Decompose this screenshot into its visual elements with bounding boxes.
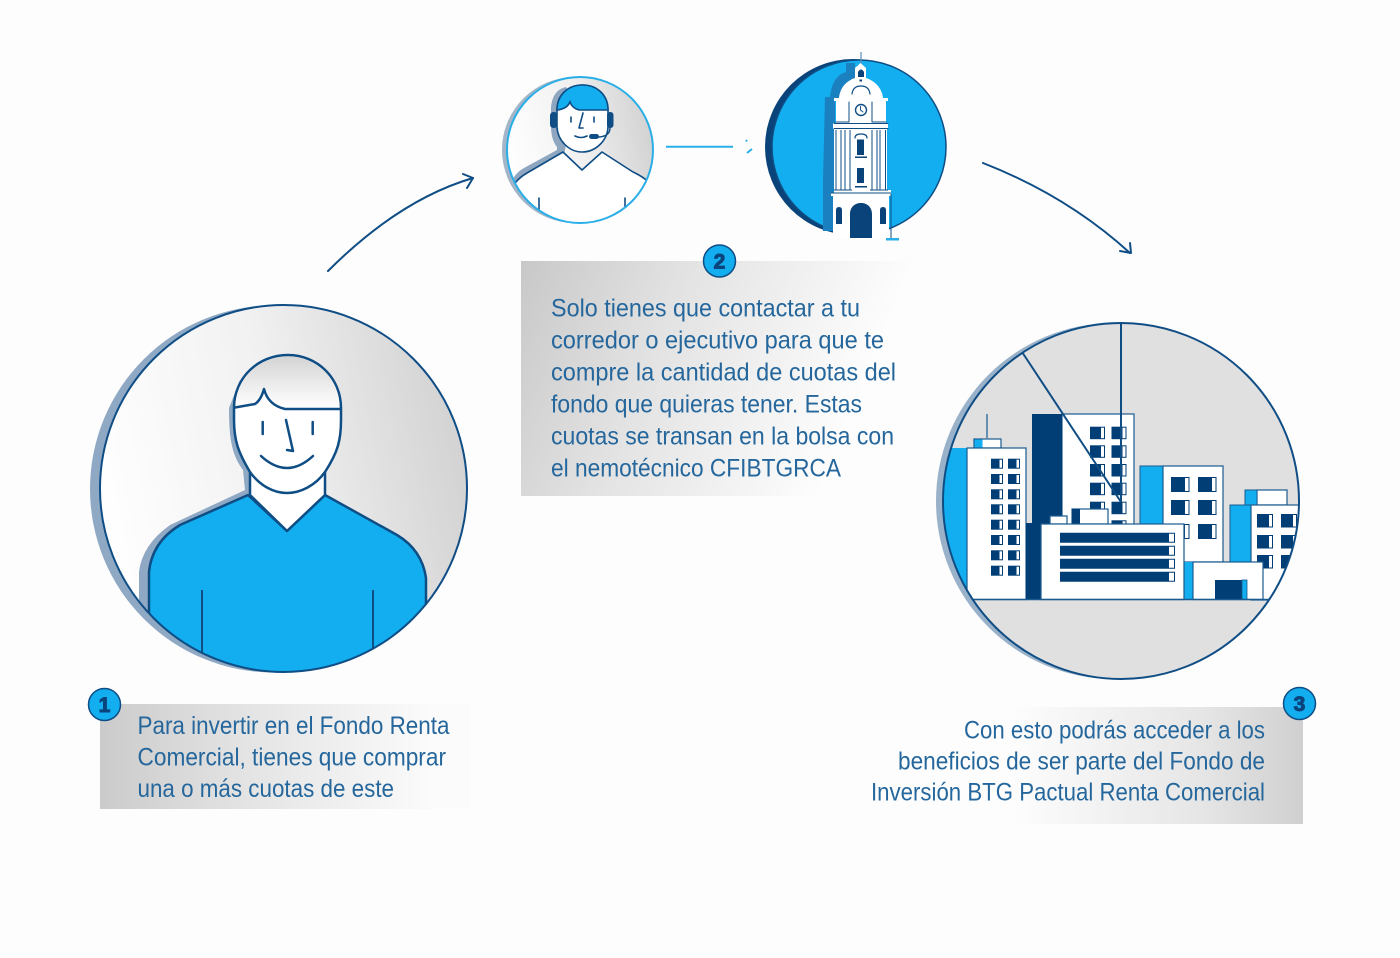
- badge: number 3: [1284, 688, 1316, 720]
- text: step 1: [138, 712, 450, 803]
- text: step 2: corredor o ejecutivo para que te: [551, 326, 884, 354]
- building left: [940, 414, 1026, 600]
- connector line between agent and tower: [666, 140, 752, 153]
- text: step 3: [871, 716, 1265, 806]
- badge: number 3: 3: [1294, 693, 1305, 716]
- text: step 3: Inversión BTG Pactual Renta Comercial: [871, 778, 1265, 806]
- text: step 1: una o más cuotas de este: [138, 775, 394, 803]
- panel: step 3 text: [871, 707, 1303, 824]
- tower columns: [831, 130, 891, 193]
- panel: step 1 text: [100, 704, 470, 809]
- text: step 2: cuotas se transan en la bolsa con: [551, 422, 894, 450]
- building mid: [1140, 466, 1223, 562]
- investor circle shadow: [90, 306, 457, 672]
- text: step 2: compre la cantidad de cuotas del: [551, 358, 896, 386]
- building right: [1230, 489, 1298, 601]
- tower door and windows: [836, 203, 886, 238]
- icon: contact agent with headset: [502, 76, 654, 224]
- icon: stock exchange clock tower: [765, 52, 946, 240]
- badge: number 2: [704, 245, 736, 277]
- panel: step 2 text: [521, 261, 911, 496]
- building front: [1041, 509, 1184, 600]
- tower shadow: [823, 63, 855, 231]
- city circle shadow: [936, 323, 1292, 679]
- investor neck: [250, 465, 325, 531]
- arrow: person to contact: [328, 174, 473, 271]
- investor head: [234, 355, 341, 493]
- text: step 3: Con esto podrás acceder a los: [964, 716, 1265, 744]
- investor shirt: [149, 495, 426, 680]
- icon: investor person: [90, 305, 467, 680]
- text: step 2: fondo que quieras tener. Estas: [551, 390, 862, 418]
- text: step 1: Para invertir en el Fondo Renta: [138, 712, 450, 740]
- agent circle shadow: [502, 77, 648, 223]
- badge: number 1: 1: [99, 694, 111, 717]
- arrow: tower to city: [983, 163, 1131, 253]
- badge: number 2: 2: [714, 250, 725, 274]
- agent head: [557, 85, 608, 152]
- tower clock: [856, 104, 866, 116]
- text: step 2: Solo tienes que contactar a tu: [551, 294, 860, 322]
- tower lantern and dome: [831, 63, 891, 238]
- building low with door: [1184, 562, 1263, 600]
- text: step 3: beneficios de ser parte del Fondo de: [898, 748, 1265, 776]
- building tall: [1026, 414, 1134, 600]
- text: step 2: el nemotécnico CFIBTGRCA: [551, 454, 841, 482]
- badge: number 1: [88, 688, 120, 720]
- investor silhouette shadow: [139, 380, 249, 610]
- icon: city buildings: [930, 323, 1311, 679]
- tower spire: [860, 52, 862, 64]
- text: step 1: Comercial, tienes que comprar: [138, 744, 446, 772]
- text: step 2: [551, 294, 896, 482]
